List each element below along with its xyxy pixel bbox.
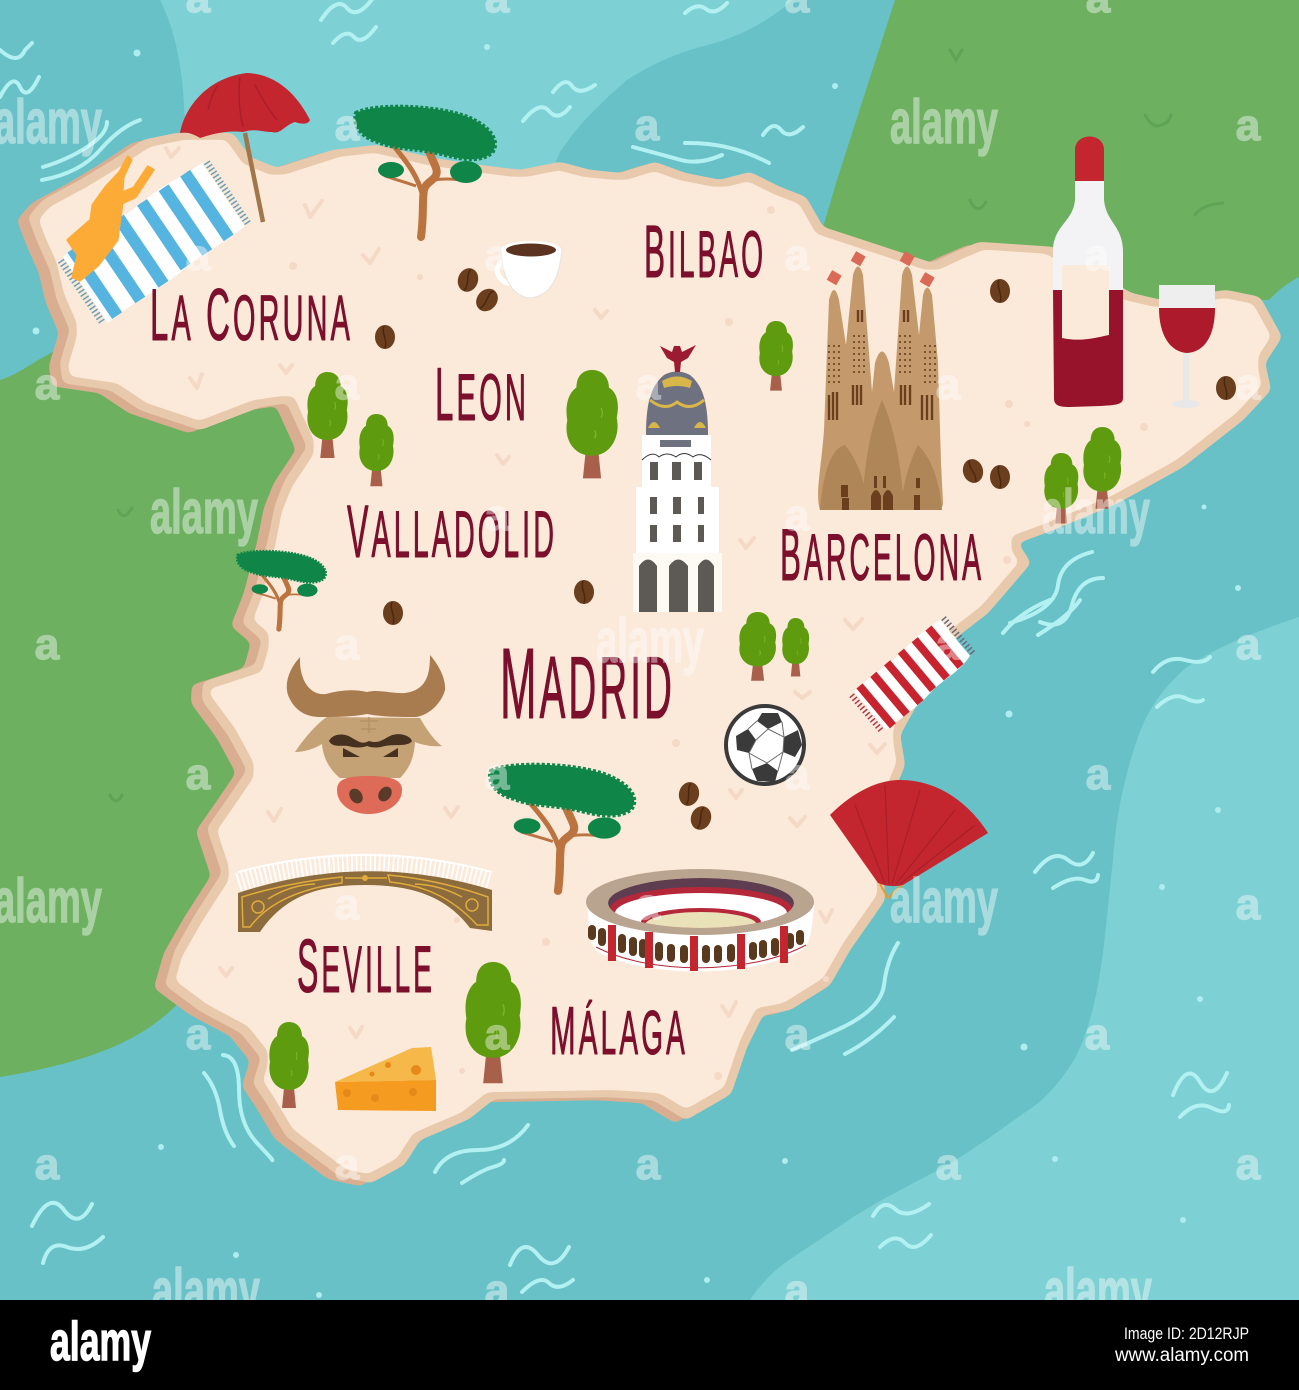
icon: pine tree north xyxy=(355,107,495,237)
statue on the dome xyxy=(660,345,696,372)
icon: red hand fan xyxy=(830,780,988,898)
icon: coffee cup xyxy=(497,241,562,298)
icon: tree 7 xyxy=(739,612,776,681)
stock watermark overlay: a xyxy=(636,880,661,929)
stock watermark overlay: a xyxy=(186,1010,211,1059)
icon: pine tree south xyxy=(490,765,634,891)
icon: wine glass xyxy=(1159,285,1215,408)
icon: tree 3 xyxy=(566,370,618,478)
icon: beach umbrella xyxy=(180,73,310,222)
stock watermark overlay: a xyxy=(485,1266,510,1315)
stock watermark overlay: a xyxy=(485,1010,510,1059)
stock watermark overlay: a xyxy=(636,1140,661,1189)
infographic: cartoon tourist map of Spain: VALLADOLID xyxy=(347,490,557,573)
stock watermark overlay: a xyxy=(936,360,961,409)
stock watermark overlay: a xyxy=(335,620,360,669)
landmark: stone bridge xyxy=(238,855,492,932)
land: France (north-east) xyxy=(821,0,1299,300)
icon: pine tree west xyxy=(237,551,326,629)
landmark: Sagrada Familia xyxy=(818,251,943,510)
footer image id: Image ID: 2D12RJP xyxy=(1124,1324,1249,1343)
stock watermark overlay: a xyxy=(485,750,510,799)
stock watermark overlay: a xyxy=(485,491,510,540)
stock watermark overlay: a xyxy=(785,1010,810,1059)
light water band: north xyxy=(160,0,793,200)
infographic: cartoon tourist map of Spain: BARCELONA xyxy=(780,515,984,596)
landmark: bullring xyxy=(586,869,814,972)
map of Spain: land body xyxy=(17,133,1282,1186)
stock watermark overlay: a xyxy=(785,231,810,280)
stock watermark overlay: a xyxy=(186,231,211,280)
stock watermark overlay: a xyxy=(785,491,810,540)
stock watermark overlay: alamy xyxy=(890,867,998,936)
stock watermark overlay: a xyxy=(335,360,360,409)
stock watermark overlay: alamy xyxy=(890,88,998,157)
label: Madrid: MADRID xyxy=(500,628,675,740)
stock watermark overlay: a xyxy=(1236,101,1261,150)
stock watermark overlay: alamy xyxy=(1042,478,1150,547)
stock watermark overlay: a xyxy=(335,101,360,150)
marks on green land xyxy=(110,50,1223,801)
stock watermark overlay: a xyxy=(1236,620,1261,669)
stock watermark overlay: a xyxy=(335,1140,360,1189)
label: Leon: LEON xyxy=(435,352,529,436)
land: Portugal (west) xyxy=(0,345,350,1077)
stock watermark overlay: a xyxy=(1236,880,1261,929)
icon: tree 10 xyxy=(269,1022,309,1108)
icon: tree 6 xyxy=(1083,427,1121,509)
label: La Coruna: LA CORUNA xyxy=(150,275,353,356)
icon: tree 9 xyxy=(466,962,521,1083)
icon: football xyxy=(726,706,804,784)
stock watermark overlay: alamy xyxy=(152,1257,260,1326)
stock watermark overlay: a xyxy=(35,1140,60,1189)
icon: cheese wedge xyxy=(335,1047,436,1111)
icon: tree 4 xyxy=(759,321,793,391)
stock watermark overlay: a xyxy=(936,1140,961,1189)
stock watermark overlay: alamy xyxy=(596,607,704,676)
pale marks on the map xyxy=(166,148,917,1037)
icons: coffee beans xyxy=(375,265,1236,833)
icon: tree 2 xyxy=(359,414,394,486)
icon: wine bottle xyxy=(1053,136,1123,407)
stock watermark overlay: alamy xyxy=(150,478,258,547)
infographic: cartoon tourist map of Spain: BILBAO xyxy=(644,210,766,293)
stock watermark overlay: a xyxy=(1236,360,1261,409)
stock watermark overlay: a xyxy=(785,1266,810,1315)
footer website: www.alamy.com xyxy=(1114,1345,1249,1366)
icon: tree 8 xyxy=(782,618,809,676)
icon: tree 1 xyxy=(307,372,348,458)
icon: bull head xyxy=(287,655,445,814)
footer logo: alamy xyxy=(50,1310,151,1372)
stock watermark overlay: a xyxy=(35,620,60,669)
stock watermark overlay: a xyxy=(35,360,60,409)
footer bar xyxy=(0,1300,1299,1390)
infographic: cartoon tourist map of Spain: SEVILLE xyxy=(297,924,435,1008)
stock watermark overlay: a xyxy=(1085,1010,1110,1059)
stock watermark overlay: a xyxy=(1086,750,1111,799)
stock watermark overlay: a xyxy=(1236,1140,1261,1189)
stock watermark overlay: a xyxy=(485,231,510,280)
icon: red striped towel xyxy=(850,616,976,734)
icon: tree 5 xyxy=(1044,453,1078,524)
stock watermark overlay: a xyxy=(785,750,810,799)
stock watermark overlay: a xyxy=(186,750,211,799)
icon: sunbather xyxy=(68,157,153,280)
label: Málaga: MÁLAGA xyxy=(550,993,688,1069)
stock watermark overlay: a xyxy=(635,101,660,150)
stock watermark overlay: alamy xyxy=(1044,1257,1152,1326)
stock watermark overlay: a xyxy=(636,360,661,409)
light water band: south-east xyxy=(750,617,1299,1300)
stock watermark overlay: a xyxy=(335,880,360,929)
icon: striped beach towel xyxy=(58,159,250,325)
landmark: Metropolis building xyxy=(633,345,722,612)
stock watermark overlay: a xyxy=(1085,231,1110,280)
stock watermark overlay: a xyxy=(936,620,961,669)
